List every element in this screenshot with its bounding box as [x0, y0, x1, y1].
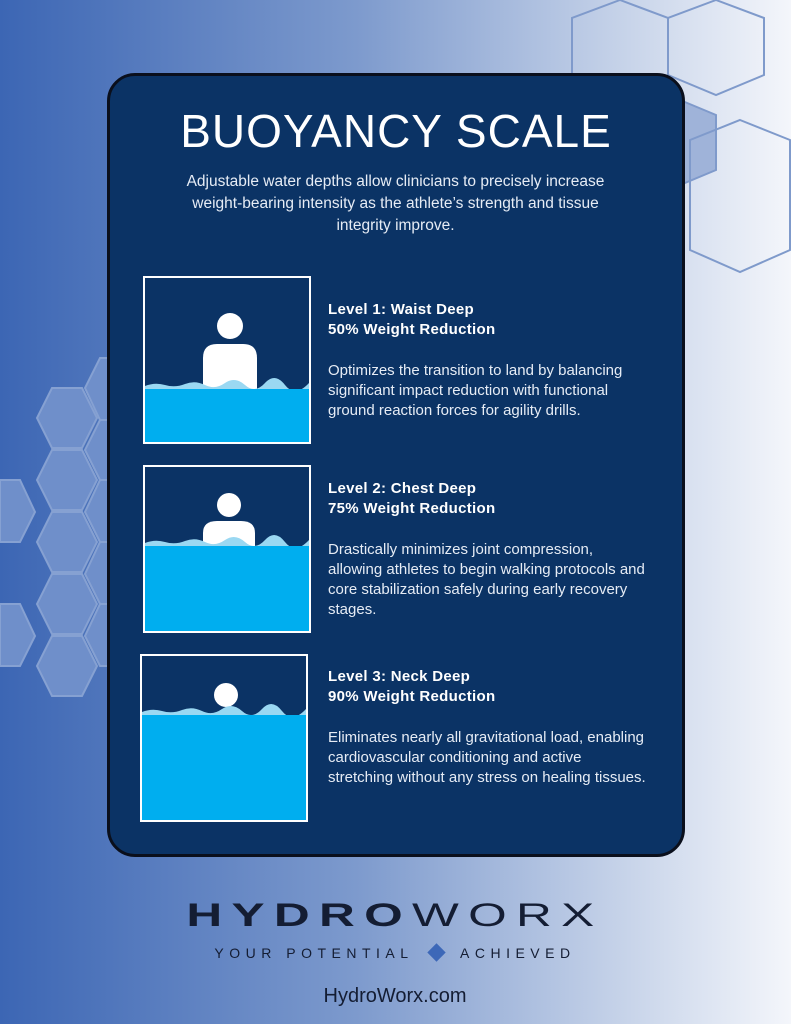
icon: neck deep	[140, 654, 308, 822]
text: level 3	[328, 668, 646, 786]
text: level 2	[328, 480, 645, 618]
title: BUOYANCY SCALE	[180, 105, 612, 157]
text: level 1: 50% Weight Reduction	[328, 321, 495, 338]
text: level 3: Level 3: Neck Deep	[328, 668, 470, 685]
tagline: YOUR POTENTIAL ACHIEVED	[214, 945, 576, 961]
text: level 3: Eliminates nearly all gravitational load, enabling cardiovascular conditioning and active stretching without any stress on healing tissues.	[328, 729, 646, 786]
icon: chest deep	[143, 465, 311, 633]
website: HydroWorx.com	[324, 985, 466, 1007]
text: level 2: Drastically minimizes joint compression, allowing athletes to begin walking protocols and core stabilization safely during early recovery stages.	[328, 541, 645, 618]
text: level 1: Level 1: Waist Deep	[328, 301, 474, 318]
text: level 1	[328, 301, 622, 419]
icon: waist deep	[143, 276, 311, 444]
text: level 3: 90% Weight Reduction	[328, 688, 495, 705]
text: level 2: Level 2: Chest Deep	[328, 480, 476, 497]
text: level 2: 75% Weight Reduction	[328, 500, 495, 517]
panel: main card	[107, 73, 685, 857]
subtitle text: Adjustable water depths allow clinicians to precisely increase weight-bearing intensity as the athlete’s strength and tissue integrity improve.	[187, 173, 604, 234]
logo: HYDROWORX	[186, 897, 604, 933]
text: level 1: Optimizes the transition to land by balancing significant impact reduction with functional ground reaction forces for agility drills.	[328, 362, 622, 419]
